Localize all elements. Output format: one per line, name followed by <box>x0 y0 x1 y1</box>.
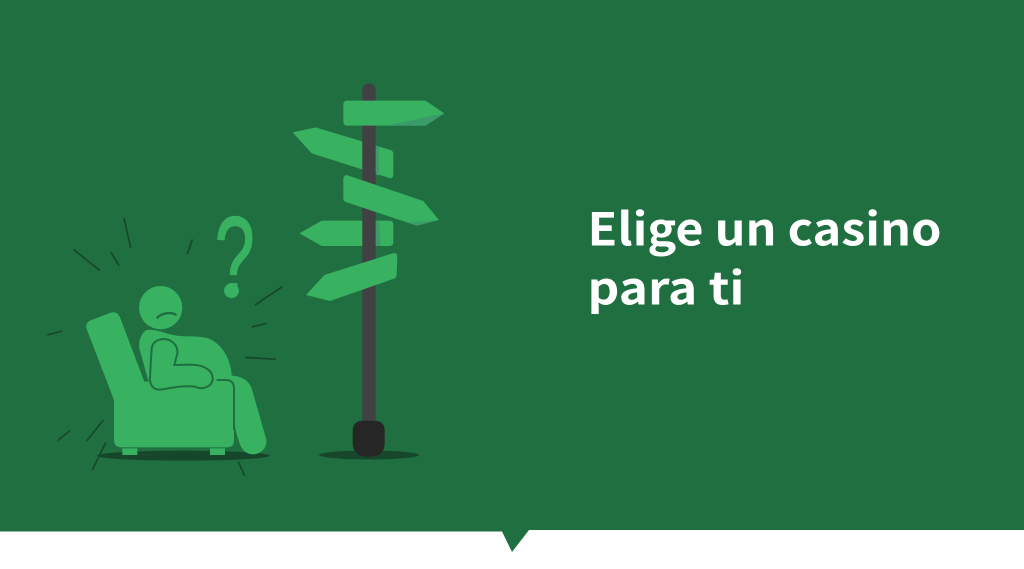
torso <box>139 330 232 387</box>
sign shadow on upper left arrow <box>376 146 379 176</box>
chair shadow <box>97 451 270 461</box>
heading line 1: Elige un casino <box>588 194 942 258</box>
sign: bottom left arrow <box>306 253 397 301</box>
sign: lower left arrow (behind pole) <box>299 221 393 246</box>
sign: upper left arrow (behind pole) <box>293 127 393 178</box>
heading line 2: para ti <box>588 252 744 318</box>
dark stress lines <box>47 218 282 476</box>
sign: top right arrow <box>343 101 444 126</box>
heading <box>588 194 942 318</box>
leg <box>227 375 266 454</box>
chair feet <box>122 448 225 455</box>
signpost <box>293 83 444 422</box>
sign shade on middle arrow <box>408 220 439 226</box>
arm <box>150 339 213 390</box>
sign shade on top arrow <box>387 113 444 126</box>
signpost shadow <box>319 450 419 460</box>
armrest outline <box>217 380 234 430</box>
sign shadow on lower left arrow <box>376 221 381 246</box>
frown <box>157 313 177 318</box>
armchair <box>86 312 234 447</box>
pole foot <box>353 421 385 457</box>
head <box>139 286 182 329</box>
sign: middle right arrow <box>343 175 439 226</box>
question mark: ? <box>215 194 255 319</box>
illustration: confused person in armchair <box>47 218 282 476</box>
pole <box>362 83 376 422</box>
